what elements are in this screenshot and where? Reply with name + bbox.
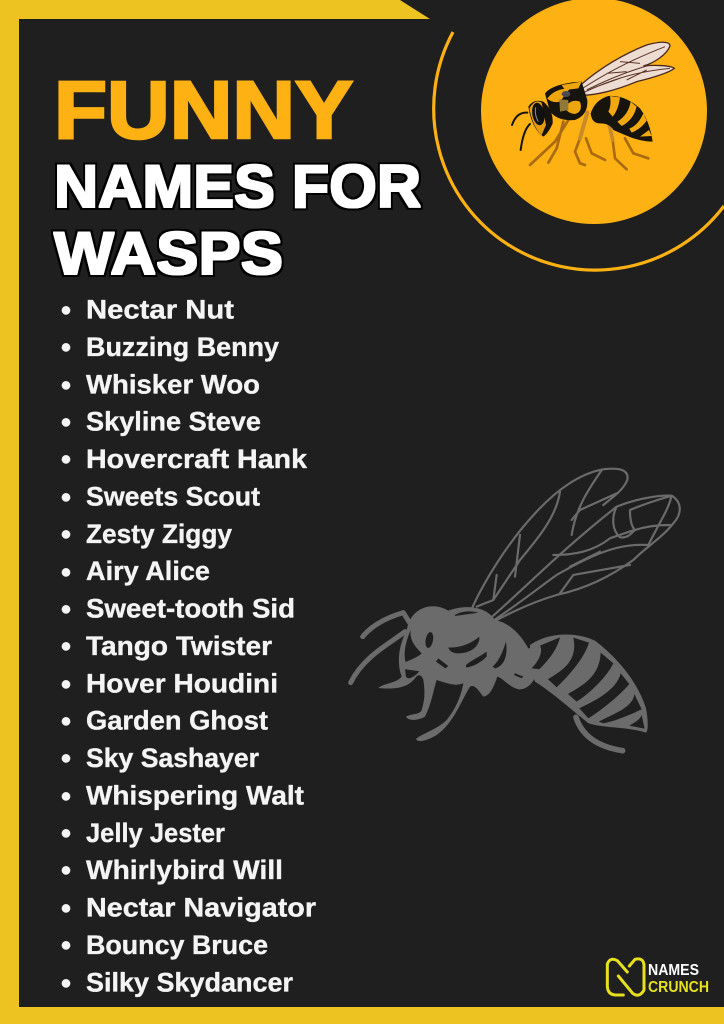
icon: colour wasp	[512, 42, 674, 169]
ghost head and thorax	[378, 606, 543, 741]
name list: Skyline Steve	[86, 407, 261, 437]
name list: Sweets Scout	[86, 481, 260, 511]
antennae	[512, 113, 530, 150]
name list: Whisker Woo	[86, 369, 260, 399]
title: NAMES FOR: NAMES FOR	[54, 153, 421, 220]
name list: Zesty Ziggy	[86, 519, 232, 549]
name list: Bouncy Bruce	[86, 930, 268, 960]
icon: ghost wasp silhouette	[351, 469, 680, 751]
wings	[572, 42, 674, 95]
orange circle badge	[481, 0, 707, 224]
name list: Nectar Nut	[86, 294, 234, 324]
name list: Hovercraft Hank	[86, 444, 307, 474]
ghost hind leg	[576, 717, 623, 751]
name list	[62, 294, 316, 997]
name list: Whirlybird Will	[86, 855, 283, 885]
name list: Silky Skydancer	[86, 967, 293, 997]
ghost abdomen stripes	[532, 637, 645, 729]
abdomen	[591, 96, 653, 142]
logo mark	[607, 959, 644, 995]
decorative ring	[434, 32, 724, 270]
logo text: CRUNCH: CRUNCH	[648, 979, 709, 996]
name list: Jelly Jester	[86, 818, 225, 848]
head	[528, 101, 553, 137]
legs	[530, 107, 648, 169]
name list: Nectar Navigator	[86, 893, 316, 923]
ghost wings	[473, 469, 680, 630]
thorax	[545, 82, 587, 120]
name list: Sky Sashayer	[86, 743, 259, 773]
ghost body details	[405, 611, 523, 678]
ghost antennae	[351, 613, 410, 683]
name list: Airy Alice	[86, 556, 210, 586]
name list: Tango Twister	[86, 631, 272, 661]
ghost abdomen	[530, 634, 648, 733]
logo text: NAMES: NAMES	[648, 962, 699, 979]
name list: Garden Ghost	[86, 706, 268, 736]
name list: Buzzing Benny	[86, 332, 279, 362]
name list: Whispering Walt	[86, 780, 304, 810]
title: FUNNY: FUNNY	[54, 65, 353, 156]
name list: Sweet-tooth Sid	[86, 594, 295, 624]
name list: Hover Houdini	[86, 668, 278, 698]
logo: Names Crunch	[607, 959, 709, 996]
title: WASPS: WASPS	[54, 220, 283, 287]
